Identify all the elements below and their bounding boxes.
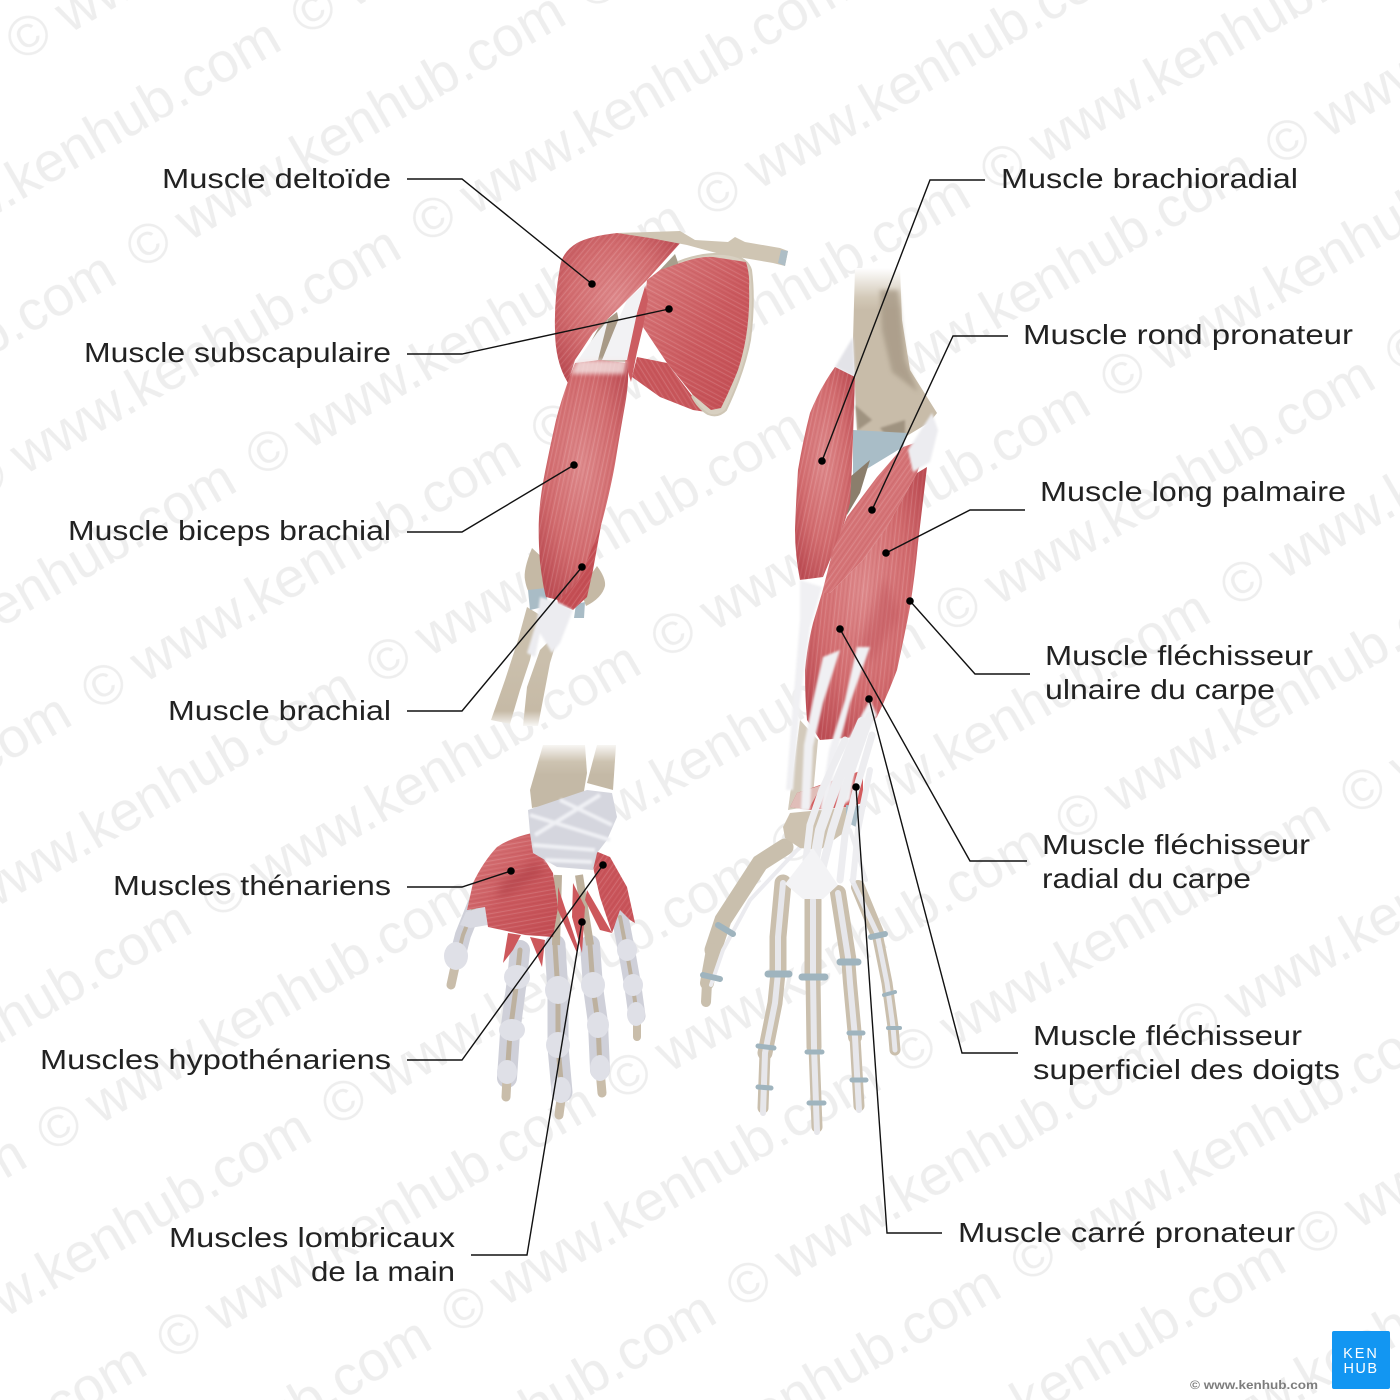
muscle: coracobrachialis xyxy=(625,284,648,382)
label: hypothénariens: Muscles hypothénariens xyxy=(40,1044,391,1075)
finger: index xyxy=(506,950,520,1097)
finger: thumb xyxy=(703,847,800,1002)
label: fléchisseur ulnaire xyxy=(1045,640,1313,705)
label: fléchisseur radial: Muscle fléchisseur xyxy=(1042,829,1310,860)
logo: Kenhub: KEN xyxy=(1343,1346,1379,1362)
label: fléchisseur superficiel xyxy=(1033,1020,1340,1085)
bone: elbow epicondyles xyxy=(525,548,605,606)
leader: deltoid xyxy=(407,179,596,288)
finger: ring xyxy=(838,893,866,1110)
muscles: lumbricals xyxy=(503,883,612,967)
muscle: pronator quadratus xyxy=(790,770,863,810)
label: fléchisseur superficiel: superficiel des doigts xyxy=(1033,1054,1340,1085)
label: lombricaux xyxy=(169,1222,455,1287)
cartilage: elbow xyxy=(528,588,585,618)
bone: scapula border xyxy=(678,254,753,415)
illustration: deep hand xyxy=(444,745,645,1115)
tendon: common flexor head xyxy=(908,413,938,472)
label: lombricaux: de la main xyxy=(311,1256,455,1287)
label: biceps brachial: Muscle biceps brachial xyxy=(68,515,391,546)
muscle: biceps brachii xyxy=(539,360,628,600)
bone: carpals xyxy=(783,807,852,850)
label: fléchisseur ulnaire: Muscle fléchisseur xyxy=(1045,640,1313,671)
leader: pronator teres xyxy=(868,336,1008,514)
tendons: biceps heads xyxy=(574,283,646,366)
tendons: forearm flexors xyxy=(786,580,877,810)
label: brachial: Muscle brachial xyxy=(168,695,391,726)
finger: little xyxy=(852,880,900,1050)
label: fléchisseur superficiel: Muscle fléchisseur xyxy=(1033,1020,1302,1051)
label: fléchisseur ulnaire: ulnaire du carpe xyxy=(1045,674,1275,705)
finger joints: ligament bands xyxy=(444,939,645,1103)
muscle: teres major xyxy=(632,357,713,413)
leader: flexor carpi radialis xyxy=(836,625,1027,861)
tendon: brachioradialis origin xyxy=(835,337,855,377)
leader: hypothenar xyxy=(407,861,607,1060)
metacarpals xyxy=(556,875,590,945)
ligaments: carpal xyxy=(528,790,617,870)
tendon: thumb base xyxy=(460,906,488,928)
label: fléchisseur radial xyxy=(1042,829,1310,894)
tendons: distal biceps xyxy=(527,597,573,657)
muscle: pronator teres xyxy=(822,440,923,593)
leader: pronator quadratus xyxy=(852,783,942,1233)
bone: humerus xyxy=(853,268,937,437)
label: deltoïde: Muscle deltoïde xyxy=(162,163,391,194)
bone: glenoid xyxy=(658,254,680,272)
leader: brachioradialis xyxy=(818,180,985,465)
cartilage: wrist xyxy=(846,805,866,828)
bone: humerus head xyxy=(580,312,628,362)
muscle: brachioradialis xyxy=(795,367,855,580)
leader: lumbricals xyxy=(471,918,586,1255)
bone: radius and ulna xyxy=(491,607,560,726)
leader: palmaris longus xyxy=(882,510,1025,557)
label: lombricaux: Muscles lombricaux xyxy=(169,1222,455,1253)
finger: middle xyxy=(555,945,562,1115)
label: carré pronateur: Muscle carré pronateur xyxy=(958,1217,1295,1248)
cartilage: elbow xyxy=(853,430,907,477)
bone: clavicle xyxy=(617,231,788,266)
leader: flexor carpi ulnaris xyxy=(906,597,1030,674)
label: thénariens: Muscles thénariens xyxy=(113,870,391,901)
logo: Kenhub: HUB xyxy=(1343,1361,1379,1377)
leader: thenar xyxy=(407,867,515,887)
illustration: shoulder and upper arm xyxy=(491,231,788,726)
finger: middle xyxy=(802,900,825,1132)
leader: brachialis xyxy=(407,563,586,711)
illustration: superficial forearm and hand xyxy=(703,268,938,1132)
leader: biceps xyxy=(407,461,578,532)
logo: Kenhub xyxy=(1332,1331,1390,1389)
finger: ring xyxy=(590,945,602,1093)
muscle: deltoid xyxy=(555,233,683,383)
copyright: © www.kenhub.com xyxy=(1190,1380,1318,1392)
label: brachioradial: Muscle brachioradial xyxy=(1001,163,1298,194)
leader: subscapularis xyxy=(407,305,673,354)
bones: radius and ulna at wrist xyxy=(530,745,616,808)
muscle: subscapularis xyxy=(643,257,749,410)
label: rond pronateur: Muscle rond pronateur xyxy=(1023,319,1353,350)
finger: index xyxy=(758,883,789,1113)
bone: distal radius xyxy=(788,720,818,810)
bone: proximal forearm xyxy=(847,460,870,515)
muscle: brachialis xyxy=(557,520,602,610)
muscle: flexor mass xyxy=(805,467,927,740)
muscle: thenar xyxy=(467,833,558,937)
label: subscapulaire: Muscle subscapulaire xyxy=(84,337,391,368)
tendons: wrist bundle and palmar fan xyxy=(785,716,872,899)
finger: little xyxy=(620,917,637,1037)
leader: flexor digitorum superficialis xyxy=(865,695,1018,1053)
label: fléchisseur radial: radial du carpe xyxy=(1042,863,1251,894)
muscle: hypothenar xyxy=(593,850,635,933)
finger: thumb xyxy=(451,905,475,985)
label: long palmaire: Muscle long palmaire xyxy=(1040,476,1346,507)
